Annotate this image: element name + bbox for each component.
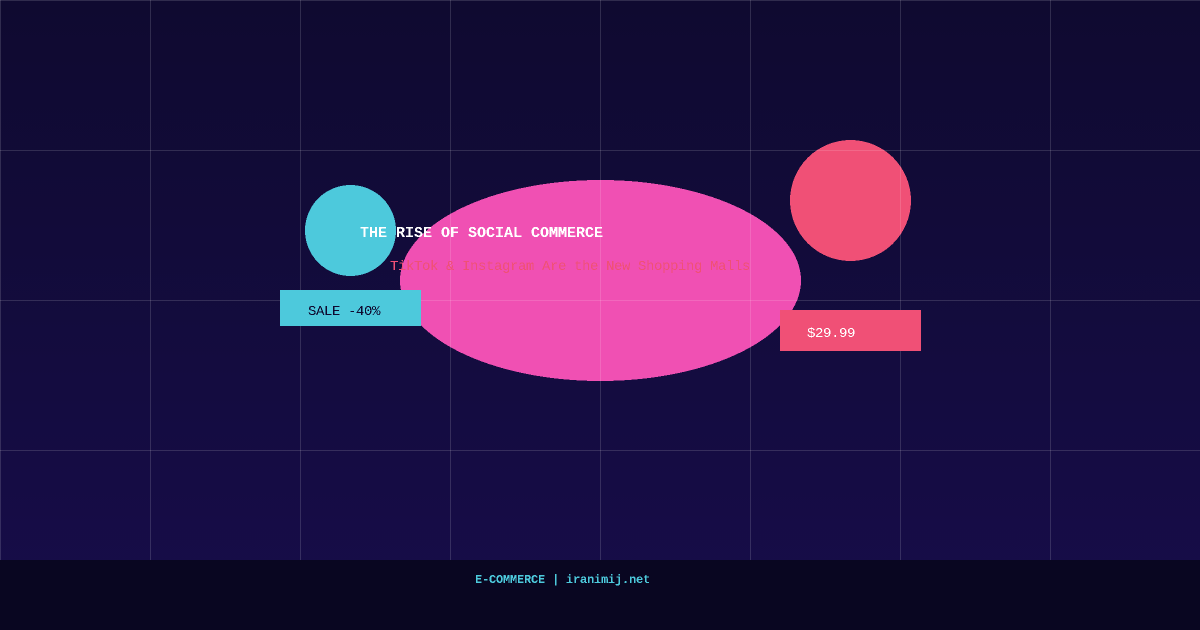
tag label: price: $29.99 <box>807 326 855 342</box>
tag: sale <box>280 290 421 326</box>
footer text: E-COMMERCE | iranimij.net <box>475 573 650 587</box>
shape: coral circle <box>790 140 911 261</box>
shape: cyan circle <box>305 185 396 276</box>
tag background: sale <box>280 290 421 326</box>
tag label: sale: SALE -40% <box>308 304 381 320</box>
title: THE RISE OF SOCIAL COMMERCE <box>360 225 603 242</box>
footer band <box>0 560 1200 630</box>
tag background: price <box>780 310 921 351</box>
tag: price <box>780 310 921 351</box>
shape: pink central ellipse <box>400 180 801 381</box>
subtitle: TikTok & Instagram Are the New Shopping Malls <box>390 259 750 275</box>
